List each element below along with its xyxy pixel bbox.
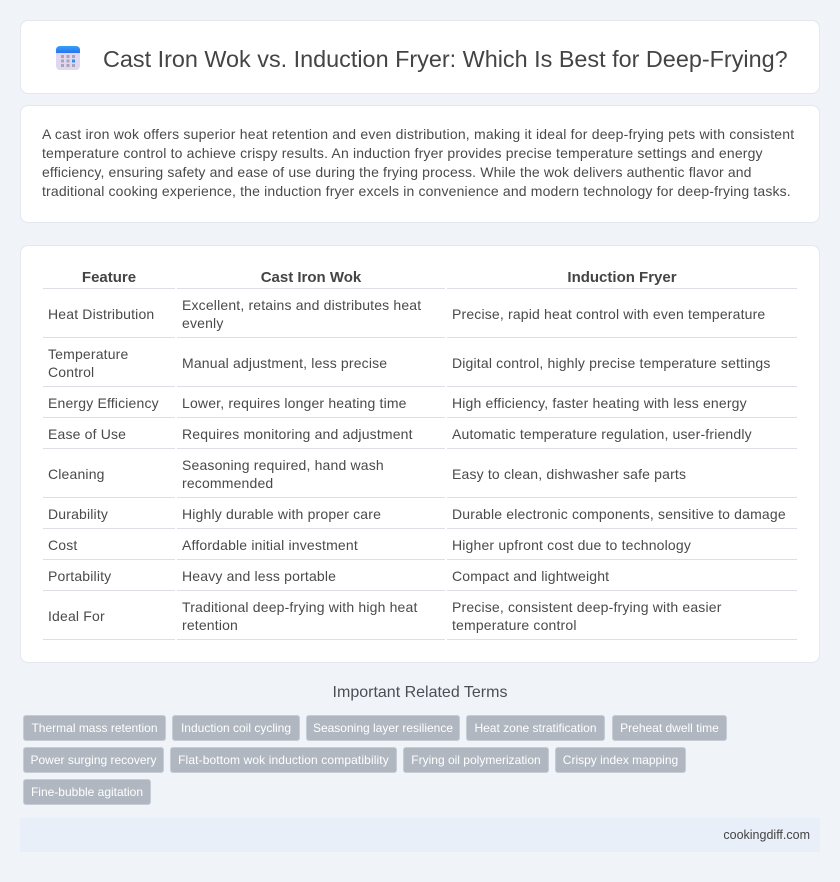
row: cleaning: Cleaning bbox=[48, 466, 105, 482]
table header: Cast Iron Wok bbox=[261, 269, 361, 286]
row: durability: Durability bbox=[48, 506, 108, 522]
row: energy efficiency: High efficiency, faster heating with less energy bbox=[452, 395, 747, 411]
header panel bbox=[20, 20, 820, 94]
row: ideal for: Ideal For bbox=[48, 608, 105, 624]
row: energy efficiency: Lower, requires longer heating time bbox=[182, 395, 407, 411]
row: ease of use: Ease of Use bbox=[48, 426, 126, 442]
row: ideal for: Traditional deep-frying with high heat bbox=[182, 599, 418, 615]
row: energy efficiency: Energy Efficiency bbox=[48, 395, 159, 411]
row: portability: Portability bbox=[48, 568, 111, 584]
row: portability bbox=[48, 568, 609, 584]
intro text panel bbox=[20, 105, 820, 223]
row: cost: Higher upfront cost due to technology bbox=[452, 537, 691, 553]
related terms chips: Crispy index mapping bbox=[563, 753, 678, 767]
related terms chips: Preheat dwell time bbox=[620, 721, 719, 735]
row: cleaning: Seasoning required, hand wash bbox=[182, 457, 384, 473]
intro paragraph: A cast iron wok offers superior heat retention and even distribution, making it ideal for deep-frying pets with consistent bbox=[42, 126, 794, 142]
row: ideal for: temperature control bbox=[452, 617, 577, 633]
row: temperature control: Manual adjustment, less precise bbox=[182, 355, 387, 371]
table header bbox=[82, 269, 677, 286]
related terms chips: Heat zone stratification bbox=[474, 721, 597, 735]
row: cleaning: Easy to clean, dishwasher safe parts bbox=[452, 466, 686, 482]
icon: calendar bbox=[56, 46, 80, 70]
row: energy efficiency bbox=[48, 395, 747, 411]
row: portability: Heavy and less portable bbox=[182, 568, 336, 584]
row: ideal for bbox=[48, 599, 722, 633]
related terms heading: Important Related Terms bbox=[333, 684, 507, 701]
related terms chips: Seasoning layer resilience bbox=[313, 721, 453, 735]
row: cost: Cost bbox=[48, 537, 77, 553]
row: durability: Durable electronic components, sensitive to damage bbox=[452, 506, 786, 522]
row: cleaning bbox=[48, 457, 686, 491]
row: ease of use bbox=[48, 426, 752, 442]
intro paragraph: traditional cooking experience, the induction fryer excels in convenience and modern technology for deep-frying tasks. bbox=[42, 183, 791, 199]
row: temperature control bbox=[48, 346, 771, 380]
table header: Feature bbox=[82, 269, 136, 286]
row: ideal for: Precise, consistent deep-frying with easier bbox=[452, 599, 722, 615]
row: portability: Compact and lightweight bbox=[452, 568, 609, 584]
related terms chips: Induction coil cycling bbox=[181, 721, 291, 735]
row: temperature control: Digital control, highly precise temperature settings bbox=[452, 355, 771, 371]
row: temperature control: Temperature bbox=[48, 346, 128, 362]
row: ideal for: retention bbox=[182, 617, 238, 633]
intro paragraph: efficiency, ensuring safety and ease of use during the frying process. While the wok delivers authentic flavor and bbox=[42, 164, 752, 180]
row: ease of use: Automatic temperature regulation, user-friendly bbox=[452, 426, 752, 442]
title: Cast Iron Wok vs. Induction Fryer: Which Is Best for Deep-Frying? bbox=[103, 46, 788, 72]
footer bar bbox=[20, 818, 820, 852]
related terms chips: Thermal mass retention bbox=[31, 721, 158, 735]
row: cleaning: recommended bbox=[182, 475, 273, 491]
row: heat distribution: Excellent, retains and distributes heat bbox=[182, 297, 421, 313]
row: durability: Highly durable with proper care bbox=[182, 506, 381, 522]
related terms chips: Fine-bubble agitation bbox=[31, 785, 143, 799]
related terms chips: Power surging recovery bbox=[30, 753, 157, 767]
table header: Induction Fryer bbox=[567, 269, 677, 286]
row: heat distribution: Precise, rapid heat control with even temperature bbox=[452, 306, 765, 322]
row: ease of use: Requires monitoring and adjustment bbox=[182, 426, 413, 442]
footer site name: cookingdiff.com bbox=[723, 828, 810, 842]
row: heat distribution: evenly bbox=[182, 315, 224, 331]
comparison table panel bbox=[20, 245, 820, 663]
row: heat distribution: Heat Distribution bbox=[48, 306, 154, 322]
row: cost bbox=[48, 537, 691, 553]
related terms chips: Flat-bottom wok induction compatibility bbox=[178, 753, 389, 767]
intro paragraph: temperature control to achieve crispy results. An induction fryer provides precise temperature settings and energy bbox=[42, 145, 763, 161]
row: cost: Affordable initial investment bbox=[182, 537, 358, 553]
row: durability bbox=[48, 506, 786, 522]
related terms chips: Frying oil polymerization bbox=[411, 753, 541, 767]
intro paragraph bbox=[42, 126, 794, 199]
row: temperature control: Control bbox=[48, 364, 94, 380]
row: heat distribution bbox=[48, 297, 765, 331]
related terms chips bbox=[23, 715, 727, 805]
